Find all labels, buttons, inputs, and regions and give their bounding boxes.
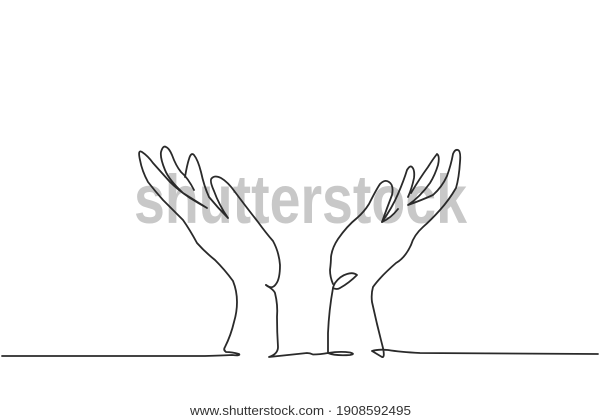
right hand xyxy=(330,150,598,357)
wrist connection and ground loop xyxy=(266,285,353,357)
caption: www.shutterstock.com · 1908592495 xyxy=(189,403,411,418)
leaf loop xyxy=(333,273,357,289)
left hand xyxy=(2,147,280,356)
watermark: shutterstock xyxy=(134,161,467,238)
line art: two open hands xyxy=(2,147,598,357)
